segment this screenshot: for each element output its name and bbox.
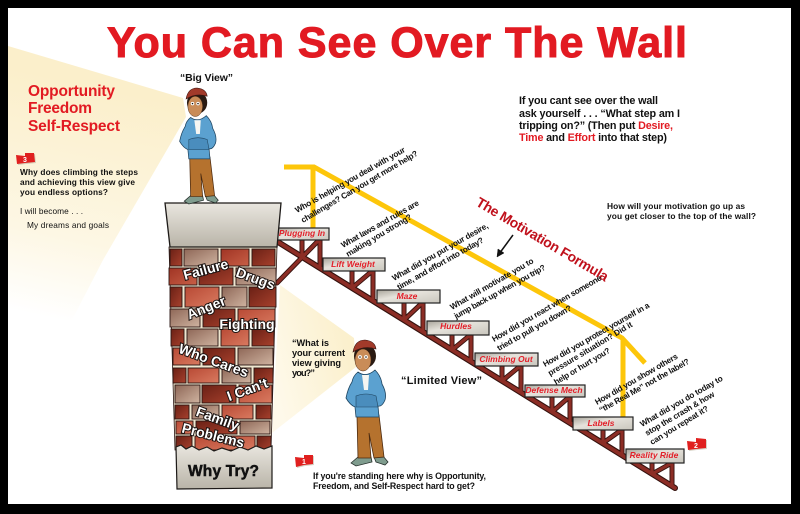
wall labels: Fighting <box>219 316 275 332</box>
top right note: tripping on?” (Then put Desire, <box>519 120 673 132</box>
big view label: “Big View” <box>180 72 233 84</box>
diagonal step questions: stop the crash & how <box>643 390 717 438</box>
motivation question <box>607 201 756 221</box>
why try block <box>176 445 272 489</box>
diagonal step questions: How did you show others <box>594 352 680 407</box>
diagonal step questions: pressure situation? Did it <box>546 320 634 378</box>
figure: boy, limited view <box>346 340 388 466</box>
current view question: view giving <box>292 358 341 368</box>
diagonal step questions: time, and effort into today? <box>396 236 485 292</box>
diagonal step questions: What will motivate you to <box>448 256 535 312</box>
top right note: ask yourself . . . “What step am I <box>519 108 680 120</box>
question block 3: My dreams and goals <box>27 220 109 230</box>
stair truss <box>277 240 675 488</box>
question block 3 <box>20 167 138 230</box>
diagonal step questions: help or hurt you? <box>552 346 612 387</box>
flag 1 <box>295 455 314 468</box>
stair steps: Plugging In <box>279 228 325 238</box>
question block 1: Freedom, and Self-Respect hard to get? <box>313 481 475 491</box>
current view question: “What is <box>292 338 329 348</box>
diagonal step questions: jump back up when you trip? <box>452 263 547 321</box>
wall labels: Failure <box>181 255 230 283</box>
light cone: big view <box>8 46 186 320</box>
stair steps: Reality Ride <box>630 450 679 460</box>
wall labels: Family <box>194 403 241 433</box>
diagonal step questions: “the Real Me” not the label? <box>598 357 691 415</box>
diagonal step questions: can you repeat it? <box>648 404 710 447</box>
top right note: If you cant see over the wall <box>519 95 658 107</box>
wall labels: Anger <box>184 292 228 322</box>
callout: top benefits: Self-Respect <box>28 118 120 135</box>
flag 3 <box>16 153 36 165</box>
question block 1 <box>313 471 486 491</box>
stair steps: Lift Weight <box>331 259 376 269</box>
stair steps <box>276 228 684 463</box>
diagonal step questions: making you strong? <box>344 212 413 259</box>
light cone: limited view <box>272 285 356 433</box>
diagonal step questions: Who is helping you deal with your <box>294 145 407 215</box>
motivation question: you get closer to the top of the wall? <box>607 211 756 221</box>
callout: top benefits <box>28 83 120 135</box>
diagonal step questions: How did you protect yourself in a <box>542 301 651 369</box>
top right note <box>519 95 680 144</box>
brick wall <box>169 247 277 450</box>
diagonal step questions: tried to pull you down? <box>496 304 573 353</box>
diagonal step questions: challenges? Can you get more help? <box>299 149 419 225</box>
callout: top benefits: Freedom <box>28 100 92 117</box>
diagonal step questions: What did you do today to <box>638 374 724 429</box>
wall labels <box>177 255 278 451</box>
current view question <box>292 338 345 378</box>
stair steps: Labels <box>588 418 615 428</box>
question block 3: and achieving this view give <box>20 177 135 187</box>
question block 1: If you're standing here why is Opportunity, <box>313 471 486 481</box>
stair steps: Defense Mech <box>525 385 583 395</box>
figure: boy, big view <box>180 88 218 204</box>
diagonal step questions: What did you put your desire, <box>391 221 490 283</box>
wall labels: Who Cares <box>177 340 251 380</box>
current view question: you?” <box>292 368 315 378</box>
top right note: Time and Effort into that step) <box>519 132 667 144</box>
diagonal step questions <box>294 145 724 447</box>
wall cap <box>165 203 281 247</box>
why try block: Why Try? <box>188 463 259 480</box>
flag 3: 3 <box>23 157 27 164</box>
callout: top benefits: Opportunity <box>28 83 115 100</box>
arrow to yellow line <box>497 235 513 257</box>
stair steps: Hurdles <box>440 321 472 331</box>
yellow motivation line <box>284 167 645 417</box>
question block 3: Why does climbing the steps <box>20 167 138 177</box>
wall labels: I Can't <box>225 374 270 404</box>
current view question: your current <box>292 348 345 358</box>
diagonal step questions: How did you react when someone <box>490 273 604 344</box>
flag 2 <box>687 438 707 451</box>
wall labels: Drugs <box>234 264 278 293</box>
motivation formula heading: The Motivation Formula <box>473 194 612 285</box>
title: You Can See Over The Wall <box>107 19 687 67</box>
wall labels: Problems <box>180 420 246 451</box>
question block 3: I will become . . . <box>20 206 83 216</box>
motivation question: How will your motivation go up as <box>607 201 745 211</box>
diagonal step questions: What laws and rules are <box>340 198 421 250</box>
flag 2: 2 <box>694 443 698 450</box>
stair steps: Climbing Out <box>479 354 534 364</box>
question block 3: you endless options? <box>20 187 108 197</box>
stair steps: Maze <box>397 291 418 301</box>
limited view label: “Limited View” <box>401 375 482 387</box>
flag 1: 1 <box>302 459 306 466</box>
